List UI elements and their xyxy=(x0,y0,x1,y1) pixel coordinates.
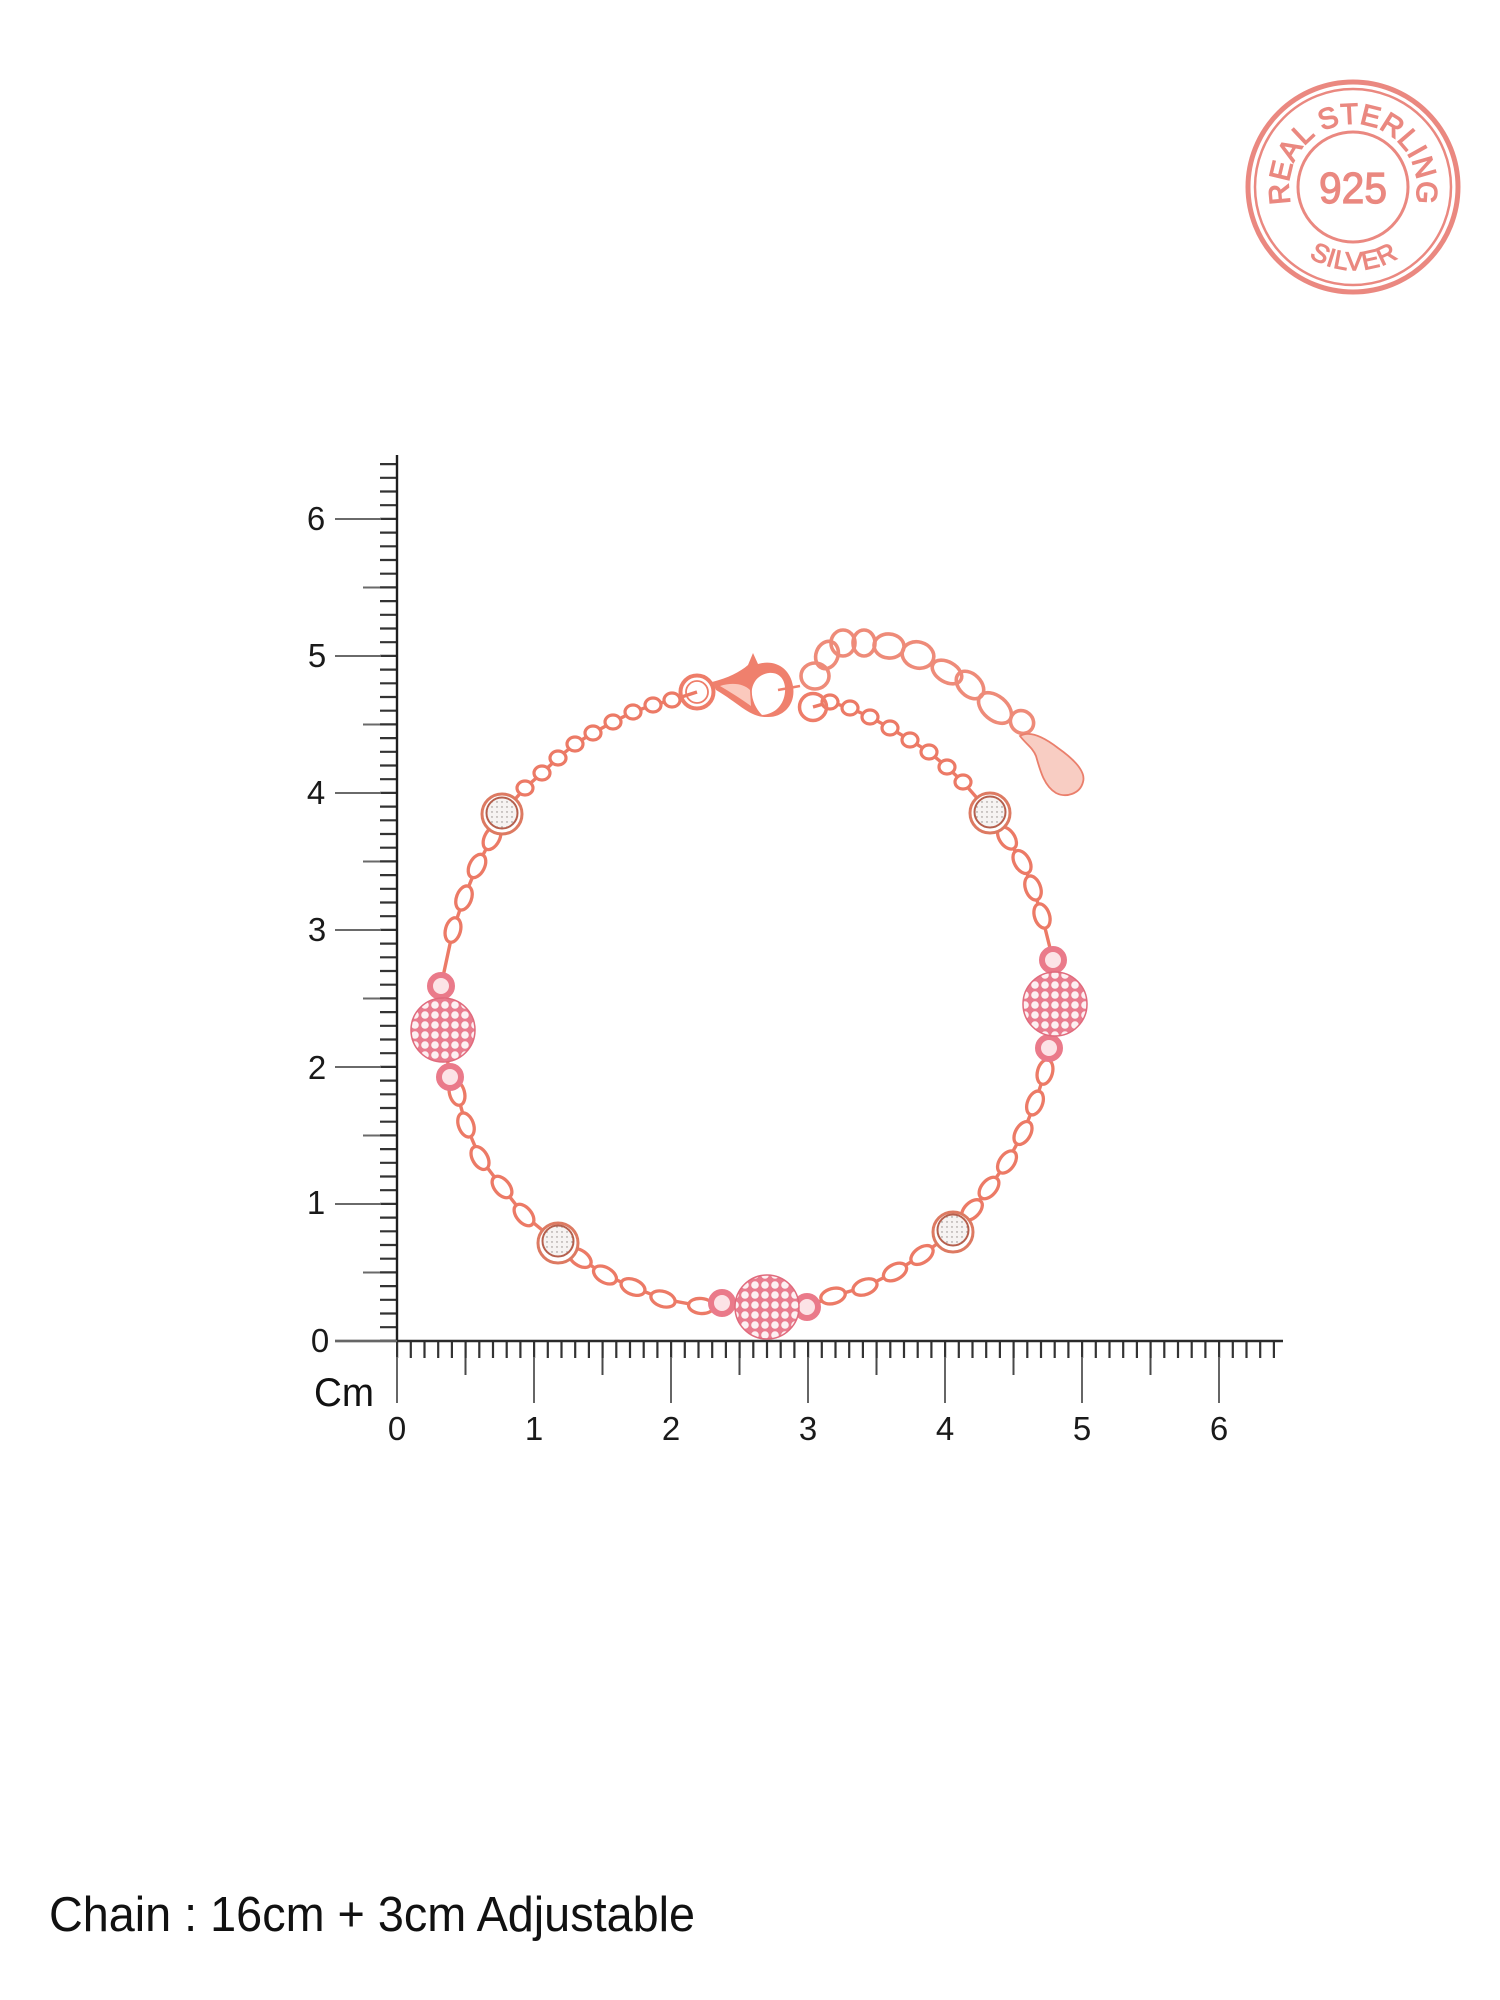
stamp: real sterling 925 silver: 925 xyxy=(1319,164,1387,213)
chain links: small round xyxy=(517,693,971,795)
caption: chain length: Chain : 16cm + 3cm Adjustable xyxy=(49,1888,695,1942)
bracelet xyxy=(411,630,1087,1339)
y axis labels: 4 xyxy=(307,774,325,811)
x axis labels: 0 xyxy=(388,1410,406,1447)
bezel stone: lower right xyxy=(933,1212,973,1252)
bezel stone: upper left xyxy=(482,794,522,834)
ruler: horizontal axis xyxy=(335,1341,1283,1447)
y axis labels: 6 xyxy=(307,500,325,537)
y axis labels xyxy=(307,500,329,1359)
teardrop tag xyxy=(1020,734,1083,795)
bezel stone: upper right xyxy=(970,793,1010,833)
pave ball: right xyxy=(1023,949,1087,1059)
stamp: real sterling 925 silver xyxy=(1246,80,1460,294)
y axis labels: 2 xyxy=(308,1049,326,1086)
x axis labels: 2 xyxy=(662,1410,680,1447)
chain links: oval xyxy=(443,823,1055,1315)
unit label: Cm: Cm xyxy=(314,1371,374,1415)
x axis labels: 5 xyxy=(1073,1410,1091,1447)
x axis labels: 4 xyxy=(936,1410,954,1447)
clasp ring xyxy=(680,676,714,708)
y axis labels: 3 xyxy=(308,911,326,948)
pave ball: bottom xyxy=(711,1275,818,1339)
x axis labels: 1 xyxy=(525,1410,543,1447)
pave ball: left xyxy=(411,975,475,1088)
y axis labels: 0 xyxy=(311,1322,329,1359)
bezel stone: lower left xyxy=(538,1223,578,1263)
x axis labels: 3 xyxy=(799,1410,817,1447)
jump ring xyxy=(800,694,826,720)
x axis labels xyxy=(388,1410,1228,1447)
stamp: real sterling 925 silver: SILVER xyxy=(1311,243,1398,271)
chain connector line xyxy=(441,692,1055,1307)
x axis labels: 6 xyxy=(1210,1410,1228,1447)
y axis labels: 5 xyxy=(308,637,326,674)
lobster clasp xyxy=(712,653,800,717)
y axis labels: 1 xyxy=(307,1184,325,1221)
stamp: real sterling 925 silver: REAL STERLING xyxy=(1268,102,1438,204)
extender chain xyxy=(801,630,1038,738)
ruler: vertical axis xyxy=(307,455,397,1359)
